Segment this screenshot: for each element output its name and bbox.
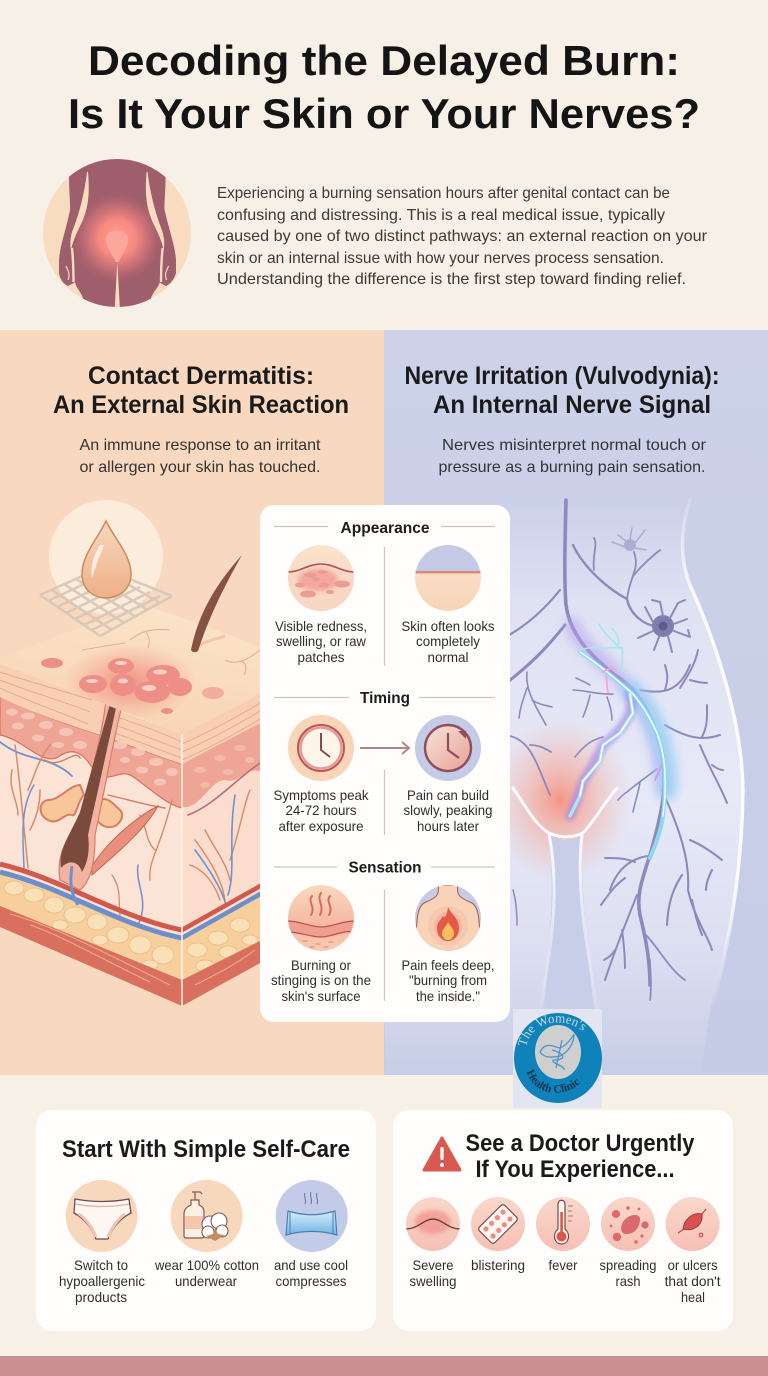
item: cool compresses: compresses xyxy=(276,1273,346,1289)
heading: nerve irritation: An Internal Nerve Signal xyxy=(433,391,711,419)
item: cotton underwear: wear 100% cotton xyxy=(154,1257,259,1273)
item: ulcers: heal xyxy=(681,1289,705,1305)
icon: normal skin xyxy=(415,545,481,611)
panel: self-care xyxy=(36,1110,376,1331)
item: cotton underwear: underwear xyxy=(175,1273,237,1289)
title: Is It Your Skin or Your Nerves? xyxy=(68,90,700,137)
item: cool compresses xyxy=(274,1180,348,1289)
item: ulcers xyxy=(665,1197,721,1305)
hair follicle xyxy=(59,700,122,905)
text: sensation comparison xyxy=(271,957,494,1004)
text: dermatitis description: An immune response to an irritant xyxy=(80,437,321,454)
dermis vessels and nerves xyxy=(0,742,172,925)
panel: nerve irritation xyxy=(384,330,768,1075)
text: sensation comparison: the inside." xyxy=(416,988,480,1004)
text: timing comparison: Symptoms peak xyxy=(274,787,369,803)
text: timing comparison: hours later xyxy=(417,818,479,834)
illustration: skin cross-section xyxy=(0,500,262,1010)
intro paragraph: Understanding the difference is the first step toward finding relief. xyxy=(217,271,686,288)
icon: torso silhouette with glowing pelvis xyxy=(43,150,191,312)
fat layer xyxy=(0,872,182,982)
section: timing: Timing xyxy=(360,690,410,707)
item: cotton underwear xyxy=(154,1180,259,1289)
heading: nerve irritation xyxy=(404,362,720,419)
front edge highlight xyxy=(181,734,183,1006)
section: sensation: Sensation xyxy=(348,860,422,876)
hair shaft xyxy=(191,555,242,652)
arrector muscle xyxy=(92,806,158,875)
icon: warning triangle xyxy=(424,1138,460,1170)
section: appearance: Appearance xyxy=(340,520,430,537)
text: nerve description: pressure as a burning pain sensation. xyxy=(438,459,706,476)
panel: comparison card xyxy=(260,505,510,1022)
item: hypoallergenic products: products xyxy=(75,1289,127,1305)
item: fever: fever xyxy=(548,1257,578,1273)
bottom band xyxy=(0,1075,768,1356)
icon: deep burning torso xyxy=(415,885,481,955)
item: hypoallergenic products: hypoallergenic xyxy=(59,1273,145,1289)
text: dermatitis description xyxy=(80,437,321,476)
text: appearance comparison: swelling, or raw xyxy=(276,633,367,649)
nerve branches xyxy=(500,500,727,1000)
item: severe swelling: Severe xyxy=(412,1257,454,1273)
text: timing comparison: 24-72 hours xyxy=(286,802,356,818)
item: spreading rash: spreading xyxy=(600,1257,656,1273)
text: sensation comparison: stinging is on the xyxy=(271,972,371,988)
title xyxy=(68,37,700,137)
heading: contact dermatitis: An External Skin Reaction xyxy=(53,391,349,419)
intro paragraph: confusing and distressing. This is a real medical issue, typically xyxy=(217,207,665,224)
body silhouette xyxy=(385,500,743,1075)
icon: clock, slow build xyxy=(415,715,481,781)
title: Decoding the Delayed Burn: xyxy=(88,37,680,84)
icon: surface burning xyxy=(288,885,354,951)
icon: allergen drop on gauze xyxy=(40,500,172,636)
item: cool compresses: and use cool xyxy=(274,1257,348,1273)
skin block left face xyxy=(0,660,185,1010)
text: sensation comparison: "burning from xyxy=(409,972,487,988)
muscle layer xyxy=(0,906,182,1008)
intro paragraph: caused by one of two distinct pathways: an external reaction on your xyxy=(217,228,707,245)
heading: self-care: Start With Simple Self-Care xyxy=(62,1136,350,1163)
item: blistering xyxy=(471,1197,525,1273)
text: timing comparison: slowly, peaking xyxy=(404,802,492,818)
item: spreading rash xyxy=(600,1197,656,1289)
heading: see a doctor: See a Doctor Urgently xyxy=(466,1130,695,1157)
intro paragraph: Experiencing a burning sensation hours after genital contact can be xyxy=(217,185,670,202)
item: blistering: blistering xyxy=(471,1257,525,1273)
text: sensation comparison: Burning or xyxy=(291,957,351,973)
main vessels xyxy=(0,864,182,930)
item: fever xyxy=(536,1197,590,1273)
heading: see a doctor xyxy=(466,1130,695,1183)
text: appearance comparison: completely xyxy=(416,633,480,649)
item: ulcers: or ulcers xyxy=(668,1257,718,1273)
item: ulcers: that don't xyxy=(665,1273,721,1289)
item: hypoallergenic products: Switch to xyxy=(74,1257,128,1273)
text: sensation comparison: Pain feels deep, xyxy=(402,957,494,973)
text: appearance comparison: normal xyxy=(428,649,468,665)
text: timing comparison: after exposure xyxy=(278,818,364,834)
logo: The Women's Health Clinic xyxy=(513,1009,602,1108)
icon: clock, peak at 24-72 hours xyxy=(288,715,354,781)
heading: contact dermatitis: Contact Dermatitis: xyxy=(88,362,314,390)
panel: contact dermatitis xyxy=(0,330,384,1075)
sebaceous glands xyxy=(40,785,122,827)
intro paragraph: skin or an internal issue with how your nerves process sensation. xyxy=(217,250,664,267)
heading: contact dermatitis xyxy=(53,362,349,419)
arrow: timing progression xyxy=(360,742,409,754)
section: sensation xyxy=(271,860,495,1004)
text: timing comparison: Pain can build xyxy=(407,787,489,803)
intro paragraph xyxy=(217,185,707,288)
panel: see a doctor xyxy=(393,1110,733,1331)
heading: nerve irritation: Nerve Irritation (Vulvodynia): xyxy=(404,362,720,390)
item: hypoallergenic products xyxy=(59,1180,145,1305)
text: nerve description: Nerves misinterpret normal touch or xyxy=(442,437,707,454)
neurons xyxy=(612,528,690,652)
section: appearance xyxy=(274,520,495,666)
text: appearance comparison xyxy=(275,618,494,665)
text: appearance comparison: Skin often looks xyxy=(402,618,494,634)
text: nerve description xyxy=(438,437,707,476)
item: severe swelling: swelling xyxy=(410,1273,456,1289)
skin block top surface xyxy=(0,607,262,734)
text: timing comparison xyxy=(274,787,492,834)
text: sensation comparison: skin's surface xyxy=(282,988,361,1004)
heading: see a doctor: If You Experience... xyxy=(476,1156,674,1183)
item: spreading rash: rash xyxy=(616,1273,640,1289)
rash blisters xyxy=(41,658,224,714)
logo: The Women's Health Clinic: Health Clinic xyxy=(526,1068,580,1093)
skin block right face xyxy=(180,690,262,1010)
footer bar xyxy=(0,1356,768,1376)
item: severe swelling xyxy=(406,1197,460,1289)
text: appearance comparison: Visible redness, xyxy=(275,618,367,634)
logo: The Women's Health Clinic: The Women's xyxy=(518,1015,586,1046)
text: appearance comparison: patches xyxy=(298,649,344,665)
icon: red swollen skin xyxy=(288,545,354,612)
illustration: body with nerve network xyxy=(385,500,743,1075)
section: timing xyxy=(274,690,495,835)
electric pain signal xyxy=(570,624,668,858)
text: dermatitis description: or allergen your skin has touched. xyxy=(80,459,320,476)
